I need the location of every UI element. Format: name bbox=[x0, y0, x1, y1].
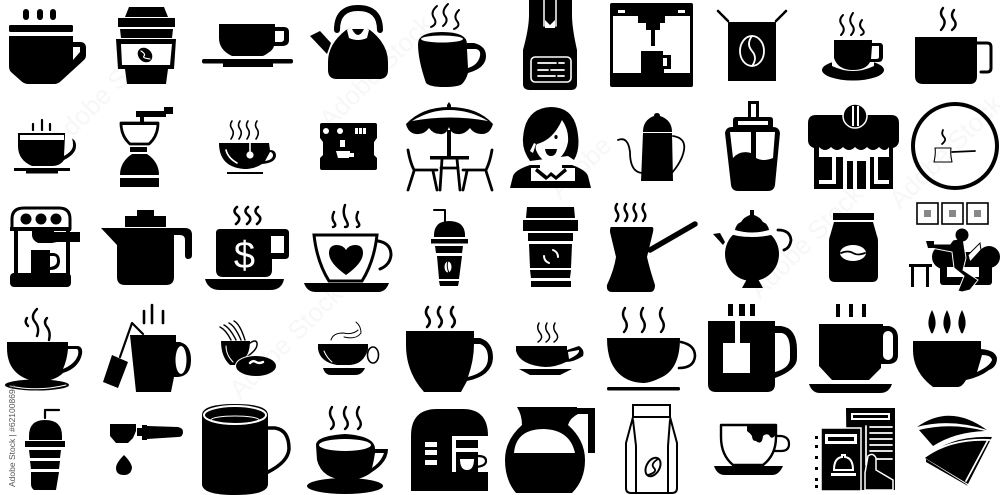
icon: espresso machine with cup bbox=[10, 208, 80, 287]
icon: paper coffee filters bbox=[917, 416, 992, 486]
icon: coffee grinder bbox=[120, 107, 173, 187]
watermark text: Adobe Stock bbox=[743, 178, 869, 304]
icon: coffee machine bbox=[610, 3, 693, 87]
icon: mug with steam bbox=[418, 4, 486, 87]
icon: enamel mug bbox=[202, 404, 289, 495]
icon: latte cup on saucer bbox=[14, 120, 76, 174]
icon: chamfered mug on saucer bbox=[809, 304, 898, 393]
icon: cup on saucer bbox=[202, 24, 293, 67]
icon: cup with steam on saucer 2 bbox=[307, 407, 388, 494]
icon: drip coffee maker bbox=[411, 409, 488, 491]
icon: iced drink cup bbox=[725, 101, 780, 191]
icon: striped frappe cup bbox=[25, 410, 65, 490]
icon: glass coffee carafe bbox=[505, 407, 595, 493]
watermark text: Adobe Stock bbox=[223, 278, 349, 404]
icon: teacup with handle ring and saucer bbox=[318, 322, 378, 375]
icon: portafilter with drop bbox=[110, 424, 183, 475]
icon: menu and clipboard bbox=[815, 408, 895, 491]
icon: large mug with steam bbox=[406, 307, 493, 392]
icon: steaming cup with three pills bbox=[9, 9, 86, 84]
icon: gooseneck pour over kettle bbox=[618, 113, 684, 181]
icon: outlined coffee pouch bbox=[626, 405, 677, 493]
icon: frappe cup with straw bbox=[431, 210, 468, 286]
icon: coffee pot with spout bbox=[101, 210, 192, 285]
icon: cup with heart bbox=[304, 205, 391, 292]
icon: coffee shop storefront bbox=[808, 104, 899, 189]
icon: shallow cup with saucer bbox=[516, 323, 584, 375]
icon: cup with dollar sign: $ bbox=[234, 235, 255, 277]
icon: coffee bottle with label bbox=[523, 0, 577, 90]
watermark text: Adobe Stock bbox=[43, 28, 169, 154]
caption: stock id: Adobe Stock | #621008694 bbox=[7, 384, 17, 487]
icon: coffee bean bag bbox=[829, 213, 878, 282]
icon: round badge with cezve bbox=[913, 104, 997, 188]
icon: cup with tea bag bbox=[219, 121, 276, 174]
icon: cup with donut bbox=[220, 321, 276, 376]
icon: bowl cup with steam bbox=[607, 308, 695, 390]
icon: takeaway cup with swirl bbox=[523, 207, 578, 287]
icon: outlined cup with drips bbox=[714, 425, 789, 475]
icon: kettle bbox=[310, 8, 388, 79]
icon: cup with steam on saucer bbox=[5, 309, 82, 390]
icon: cup with dollar sign bbox=[205, 207, 289, 290]
watermark text: Adobe bbox=[543, 130, 617, 204]
icon: takeaway cup with bean sleeve bbox=[116, 7, 176, 84]
icon: coffee bag with flaps bbox=[718, 11, 786, 81]
icon: man reading in armchair bbox=[909, 203, 1000, 292]
icon: cezve turkish pot bbox=[607, 204, 695, 292]
icon: espresso machine bbox=[320, 123, 377, 170]
watermark text bbox=[43, 8, 1000, 404]
icon: round teapot bbox=[713, 210, 791, 288]
icon: patio table and chairs with umbrella bbox=[406, 102, 493, 190]
icon: barista woman bbox=[510, 107, 591, 188]
watermark text: Adobe Stock bbox=[313, 8, 439, 134]
icon: cup on oval saucer with steam bbox=[822, 13, 884, 80]
icon: wide cup with steam bbox=[913, 310, 997, 387]
icon: mug with tea tag bbox=[708, 304, 797, 392]
icon: mug with steam bbox=[915, 8, 991, 84]
icon: mug with tea bag bbox=[103, 305, 191, 392]
